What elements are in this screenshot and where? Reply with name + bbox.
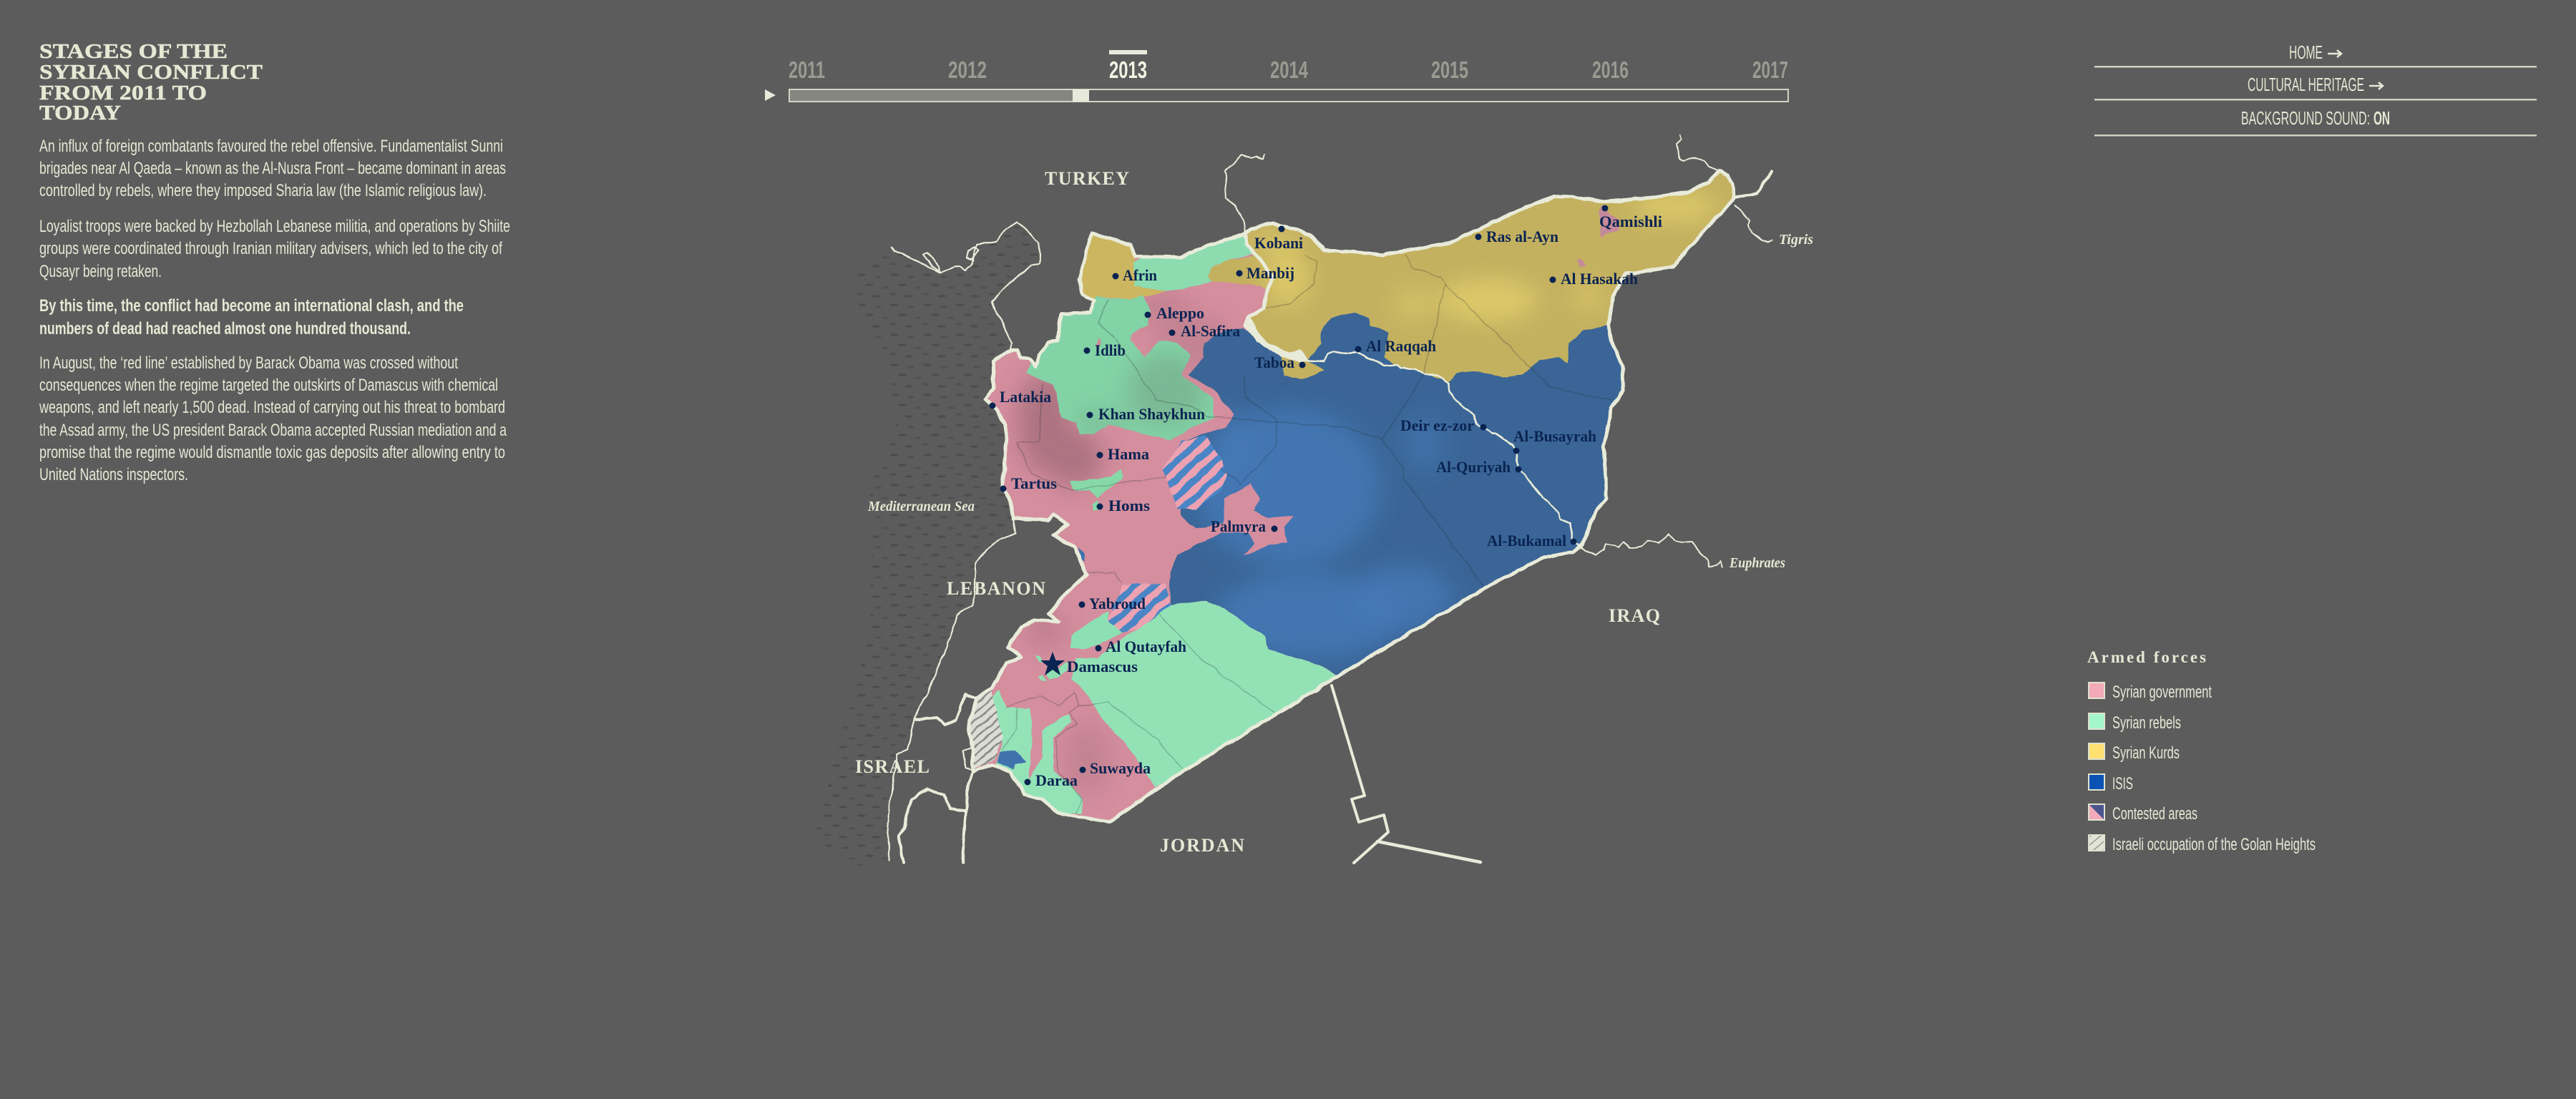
city: yabroud: Yabroud — [1089, 595, 1146, 612]
year labels: 2015 — [1431, 57, 1468, 83]
play button — [765, 89, 776, 101]
paragraph: red line: United Nations inspectors. — [39, 465, 188, 484]
city: deir ez-zor: Deir ez-zor — [1400, 416, 1474, 434]
legend item: contested areas: Contested areas — [2112, 804, 2197, 824]
paragraph: foreign combatants: brigades near Al Qaeda – known as the Al-Nusra Front – became dominant in areas — [39, 159, 506, 178]
river: tigris and northern branches — [1225, 135, 1772, 567]
city: al-busayrah — [1513, 427, 1596, 454]
water labels: Mediterranean Sea — [867, 499, 975, 514]
paragraph: loyalist troops: Loyalist troops were backed by Hezbollah Lebanese militia, and operations by Shiite — [39, 217, 510, 236]
mediterranean sea texture — [811, 222, 1039, 866]
geographic layers with roughened edges — [887, 135, 1772, 862]
government pockets in north-east — [1576, 205, 1620, 267]
syria border outline — [968, 171, 1734, 821]
intro text panel — [39, 40, 510, 484]
paragraph: red line: the Assad army, the US president Barack Obama accepted Russian mediation and a — [39, 421, 507, 440]
paragraph: loyalist troops — [39, 217, 510, 281]
region: syrian rebels idlib — [1026, 295, 1214, 441]
city: khan shaykhun: Khan Shaykhun — [1098, 405, 1205, 423]
year labels: 2013 — [1109, 57, 1147, 83]
active year marker — [1109, 50, 1147, 54]
legend — [2087, 648, 2316, 854]
paragraph: red line: In August, the ‘red line’ established by Barack Obama was crossed without — [39, 353, 458, 373]
water labels: Tigris — [1779, 232, 1813, 248]
progress bar — [789, 89, 1788, 102]
city: aleppo: Aleppo — [1156, 304, 1204, 322]
map — [811, 135, 1813, 866]
legend item: isis — [2089, 774, 2133, 793]
legend item: golan heights — [2089, 835, 2316, 854]
city: palmyra: Palmyra — [1211, 517, 1266, 535]
city: al-bukamal: Al-Bukamal — [1487, 532, 1566, 550]
contested area: east of hama — [1163, 436, 1227, 509]
city labels — [989, 205, 1662, 789]
nav: background sound — [2094, 107, 2537, 136]
river: euphrates interior — [1308, 351, 1582, 547]
legend item: syrian government: Syrian government — [2112, 683, 2212, 702]
rebels near homs — [1092, 501, 1098, 511]
legend item: syrian kurds: Syrian Kurds — [2112, 743, 2180, 763]
year labels: 2014 — [1270, 57, 1308, 83]
country labels: TURKEY — [1045, 168, 1131, 189]
navigation — [2094, 41, 2537, 136]
city: al hasakah: Al Hasakah — [1561, 270, 1638, 288]
city: kobani — [1254, 226, 1303, 252]
legend item: syrian government — [2089, 683, 2212, 702]
year labels: 2012 — [948, 57, 987, 83]
city: latakia: Latakia — [1000, 388, 1051, 406]
year labels — [789, 57, 1788, 83]
title — [39, 40, 263, 124]
title: FROM 2011 TO — [39, 82, 207, 104]
timeline — [765, 50, 1788, 102]
nav: cultural heritage: CULTURAL HERITAGE — [2248, 74, 2364, 95]
paragraph: red line: weapons, and left nearly 1,500 dead. Instead of carrying out his threat to bombard — [39, 398, 505, 417]
paragraph: red line: consequences when the regime targeted the outskirts of Damascus with chemical — [39, 376, 498, 395]
nav: background sound: BACKGROUND SOUND: — [2241, 107, 2370, 129]
city: homs: Homs — [1108, 497, 1150, 514]
legend item: isis: ISIS — [2112, 774, 2133, 793]
city: kobani: Kobani — [1254, 234, 1303, 252]
contested area: east of yabroud — [1108, 583, 1171, 632]
region: syrian kurds — [1207, 171, 1734, 381]
country labels: IRAQ — [1609, 605, 1662, 626]
legend item: golan heights: Israeli occupation of the Golan Heights — [2112, 835, 2316, 854]
city: hama: Hama — [1108, 445, 1149, 463]
region: rebels south-east desert — [1072, 600, 1338, 787]
city: al qutayfah: Al Qutayfah — [1106, 638, 1186, 655]
paragraph: red line: promise that the regime would dismantle toxic gas deposits after allowing entry to — [39, 443, 505, 462]
country labels: ISRAEL — [855, 756, 932, 777]
city: taboa: Taboa — [1254, 353, 1294, 371]
city: suwayda: Suwayda — [1090, 759, 1151, 777]
city: daraa: Daraa — [1035, 771, 1078, 789]
paragraph: foreign combatants: controlled by rebels, where they imposed Sharia law (the Islamic religious law). — [39, 181, 487, 200]
city: qamishli: Qamishli — [1599, 213, 1662, 230]
city: manbij: Manbij — [1246, 264, 1294, 282]
water labels — [867, 232, 1813, 571]
region: isis — [1163, 301, 1623, 675]
country labels — [855, 168, 1662, 856]
paragraph: foreign combatants — [39, 137, 506, 200]
lake assad — [1245, 318, 1309, 361]
country labels: JORDAN — [1160, 835, 1246, 856]
city: tartus: Tartus — [1011, 474, 1057, 492]
legend title: Armed forces — [2087, 648, 2206, 666]
nav: background sound: ON — [2373, 107, 2390, 129]
paragraph: loyalist troops: Qusayr being retaken. — [39, 262, 162, 281]
year labels: 2016 — [1592, 57, 1629, 83]
coast lines — [887, 222, 1040, 861]
legend item: syrian rebels: Syrian rebels — [2112, 713, 2181, 733]
city: qamishli — [1599, 205, 1662, 230]
paragraph: international clash — [39, 296, 464, 338]
small government enclave near idlib — [1096, 338, 1101, 348]
paragraph: foreign combatants: An influx of foreign combatants favoured the rebel offensive. Fundamentalist Sunni — [39, 137, 503, 156]
golan heights occupation — [970, 690, 1002, 769]
city: ras al-ayn: Ras al-Ayn — [1486, 228, 1558, 245]
border: lebanon-israel and jordan — [899, 694, 975, 862]
rebels around damascus — [1035, 655, 1068, 680]
nav: cultural heritage — [2094, 74, 2537, 100]
paragraph: international clash: By this time, the conflict had become an international clash, and the — [39, 296, 464, 316]
year labels: 2017 — [1752, 57, 1788, 83]
city: al raqqah: Al Raqqah — [1366, 337, 1436, 355]
city: damascus with star — [1040, 652, 1138, 675]
city: al-busayrah: Al-Busayrah — [1513, 427, 1596, 445]
region: syrian rebels north — [1134, 235, 1254, 290]
border: jordan-saudi — [1377, 841, 1480, 862]
legend item: contested areas — [2089, 804, 2197, 824]
isis pocket near qalamoun — [1079, 547, 1085, 562]
internal province lines — [1002, 255, 1613, 814]
legend item: syrian kurds — [2089, 743, 2180, 763]
nav: home: HOME — [2289, 41, 2323, 63]
region: syrian government — [975, 254, 1337, 820]
syria control regions — [968, 171, 1734, 821]
city: al-safira: Al-Safira — [1181, 322, 1240, 340]
title: SYRIAN CONFLICT — [39, 61, 263, 84]
isis pocket in south — [997, 750, 1026, 769]
country labels: LEBANON — [947, 578, 1048, 599]
water labels: Euphrates — [1729, 555, 1785, 571]
city: al-quriyah: Al-Quriyah — [1436, 458, 1511, 476]
nav: home — [2094, 41, 2537, 67]
city: afrin: Afrin — [1123, 266, 1157, 284]
paragraph: international clash: numbers of dead had reached almost one hundred thousand. — [39, 319, 411, 338]
city: latakia — [989, 388, 1051, 409]
euphrates thick border line — [1245, 235, 1273, 341]
neighbouring borders and coast — [887, 135, 1772, 862]
region: yellow kurdish afrin — [1079, 233, 1167, 301]
border: jordan-iraq — [1332, 685, 1388, 863]
city: damascus with star: Damascus — [1067, 658, 1138, 675]
legend item: syrian rebels — [2089, 713, 2181, 733]
region: rebels qalamoun — [1070, 612, 1123, 649]
paragraph: red line — [39, 353, 507, 484]
title: STAGES OF THE — [39, 40, 228, 63]
border: turkey-iraq — [1735, 172, 1772, 197]
region: rebels south west — [993, 690, 1083, 814]
year labels: 2011 — [789, 57, 825, 83]
title: TODAY — [39, 102, 121, 124]
paragraph: loyalist troops: groups were coordinated through Iranian military advisers, which led to the city of — [39, 239, 502, 258]
city: idlib: Idlib — [1095, 341, 1126, 359]
region: rebels near hama — [1070, 468, 1123, 499]
